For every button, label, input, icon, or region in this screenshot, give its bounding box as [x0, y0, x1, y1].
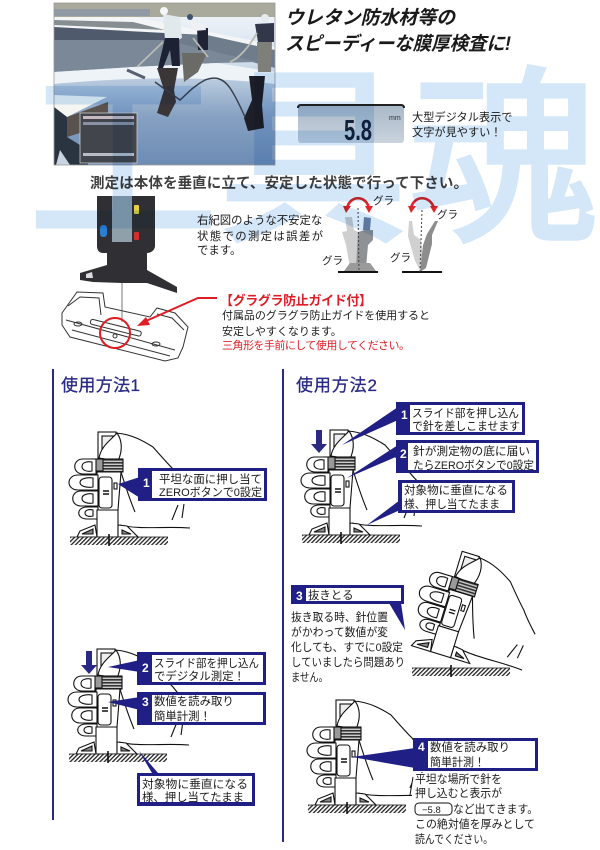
callout: keep perpendicular: 様、押し当てたまま [404, 497, 500, 511]
callout: step 1 [342, 402, 525, 445]
wobble diagram right: グラ [437, 208, 458, 221]
device photo with anti-wobble guide [62, 196, 217, 361]
callout: step 1: スライド部を押し込ん [412, 406, 519, 420]
text: unstable measurement warning [197, 213, 324, 257]
illustration: hand holding gauge, zero setting [69, 432, 192, 546]
callout: step 1 [118, 468, 267, 501]
callout: step 3 [108, 692, 266, 725]
photo: workers coating a waterproof roof [54, 3, 275, 165]
text: step 3 explanation [291, 610, 405, 684]
text: step 3 explanation: していましたら問題あり [291, 656, 405, 669]
wobble diagram right [390, 198, 458, 272]
heading: method 1: 使用方法1 [61, 375, 140, 395]
callout: anti-wobble guide included [220, 293, 430, 352]
callout: step 3: 数値を読み取り [154, 694, 234, 708]
callout: anti-wobble guide included: 安定しやすくなります。 [222, 325, 342, 338]
readout: -5.8: −5.8 [422, 805, 441, 816]
callout: step 2: でデジタル測定！ [154, 669, 245, 683]
text: step 4 explanation: 押し込むと表示が [415, 786, 503, 800]
callout: step 1: 1 [401, 408, 408, 422]
callout: step 4: 4 [418, 740, 425, 754]
callout: step 1: 1 [143, 476, 150, 490]
text: step 4 explanation: 平坦な場所で針を [415, 772, 502, 786]
callout: step 4: 簡単計測！ [430, 755, 485, 769]
text: step 3 explanation: 抜き取る時、針位置 [291, 610, 388, 624]
callout: step 2: たらZEROボタンで0設定 [413, 459, 534, 472]
callout: keep perpendicular: 様、押し当てたまま [142, 790, 244, 804]
text: step 3 explanation: がかわって数値が変 [291, 625, 388, 639]
LCD display closeup: 5.8 [344, 115, 372, 147]
text: step 3 explanation: ません。 [291, 671, 328, 684]
callout: step 2: 2 [400, 447, 407, 461]
callout: step 3: 3 [142, 695, 149, 709]
callout: keep perpendicular [137, 751, 255, 806]
callout: anti-wobble guide included: 付属品のグラグラ防止ガイドを使用すると [222, 308, 430, 322]
callout: step 2: スライド部を押し込ん [154, 656, 259, 670]
heading: method 2: 使用方法2 [296, 375, 377, 395]
text: step 4 explanation [410, 772, 540, 846]
callout: step 2: 2 [142, 661, 149, 675]
callout: keep perpendicular: 対象物に垂直になる [142, 777, 248, 791]
panel: usage method 1 [52, 369, 267, 820]
wobble diagram right: グラ [390, 251, 411, 264]
callout: anti-wobble guide included: 【グラグラ防止ガイド付】 [220, 293, 372, 308]
watermark: 工具魂: 工具魂 [28, 55, 598, 267]
diagram: wobble states [322, 194, 458, 272]
text: step 4 explanation: など出てきます。 [453, 803, 538, 816]
wobble diagram left: グラ [373, 194, 394, 207]
callout: step 1: で針を差しこませます [412, 419, 520, 433]
callout: step 2 [347, 440, 539, 478]
photo inset: data overlay panel [80, 113, 137, 163]
heading: measurement instruction: 測定は本体を垂直に立て、安定した状態で行って下さい。 [90, 174, 468, 192]
LCD display closeup: mm [389, 115, 401, 122]
callout: step 4 [352, 738, 538, 771]
LCD display closeup [298, 105, 404, 147]
text: unstable measurement warning: 状態での測定は誤差が [197, 229, 324, 243]
callout: keep perpendicular [367, 480, 515, 525]
wobble diagram left [322, 194, 394, 272]
callout: step 2: 針が測定物の底に届い [413, 444, 530, 458]
title: urethane waterproofing inspection: スピーディーな膜厚検査に! [285, 33, 511, 55]
callout: anti-wobble guide included: 三角形を手前にして使用してください。 [222, 338, 410, 352]
text: large digital display caption [412, 110, 512, 139]
callout: step 4: 数値を読み取り [430, 740, 510, 754]
illustration: hand inserting needle [301, 430, 424, 544]
icon: down arrow [81, 651, 97, 674]
icon: down arrow [311, 430, 327, 453]
anti-wobble guide outline [62, 292, 188, 361]
illustration: pulling gauge out, tilted [404, 543, 552, 679]
red highlight circle and arrow [100, 298, 217, 348]
callout: step 3 [291, 585, 405, 630]
callout: step 1: ZEROボタンで0設定 [159, 486, 262, 499]
illustration: hand pressing slider [68, 649, 191, 763]
callout: step 3: 抜きとる [308, 588, 354, 602]
wobble diagram left: グラ [322, 254, 343, 267]
callout: step 1: 平坦な面に押し当て [159, 472, 262, 486]
title: urethane waterproofing inspection: ウレタン防水材等の [285, 7, 457, 29]
text: step 4 explanation: 読んでください。 [415, 832, 493, 846]
text: unstable measurement warning: でます。 [197, 244, 241, 257]
text: unstable measurement warning: 右紀図のような不安定な [197, 213, 322, 227]
text: large digital display caption: 大型デジタル表示で [412, 110, 512, 124]
callout: step 3: 3 [296, 589, 303, 603]
panel: usage method 2 [282, 369, 552, 846]
text: step 3 explanation: 化しても、すでに0設定 [291, 641, 403, 654]
text: step 4 explanation: この絶対値を厚みとして [415, 817, 535, 831]
callout: step 3: 簡単計測！ [154, 709, 211, 723]
illustration: hand reading value [307, 700, 430, 814]
text: large digital display caption: 文字が見やすい！ [412, 125, 502, 139]
title: urethane waterproofing inspection [285, 7, 511, 55]
callout: step 2 [108, 652, 266, 685]
callout: keep perpendicular: 対象物に垂直になる [404, 483, 508, 497]
